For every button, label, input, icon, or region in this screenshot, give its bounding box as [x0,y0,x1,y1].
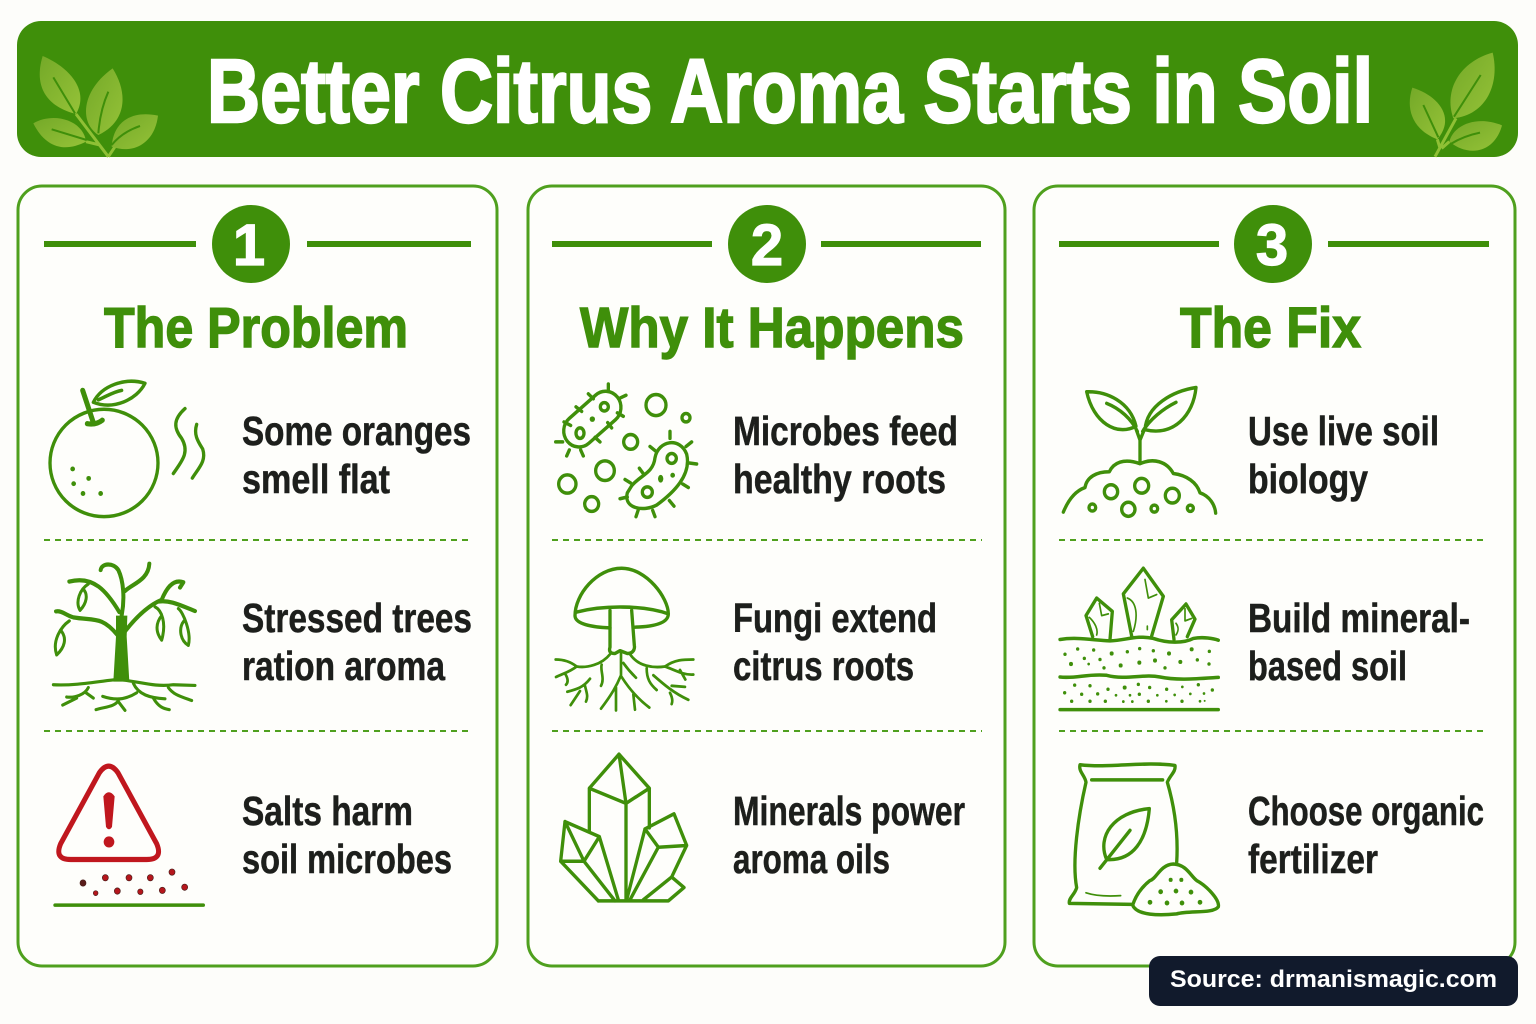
icon: orange with faint aroma [50,381,204,517]
icon: microbes [556,384,697,517]
panel: the fix [1034,186,1515,966]
panel: the problem [18,186,497,966]
text: microbes feed healthy roots [733,408,958,502]
text: stressed trees ration aroma: Stressed trees [242,595,472,641]
heading: the problem: The Problem [104,296,408,360]
icon: warning and salt [55,766,203,905]
text: salts harm soil microbes: Salts harm [242,788,413,834]
text: fungi extend citrus roots: Fungi extend [733,595,937,641]
step number 2: 2 [751,213,783,278]
source badge [1149,956,1518,1006]
text: microbes feed healthy roots: healthy roots [733,456,946,502]
icon: organic fertilizer bag [1069,764,1218,915]
text: salts harm soil microbes [242,788,452,882]
text: stressed trees ration aroma: ration aroma [242,643,446,689]
heading: why it happens: Why It Happens [580,296,964,360]
panel: why it happens [528,186,1005,966]
icon: mineral soil layers [1060,568,1218,710]
text: use live soil biology: biology [1248,456,1368,502]
text: minerals power aroma oils: Minerals power [733,788,965,834]
text: build mineral-based soil [1248,595,1470,689]
text: minerals power aroma oils: aroma oils [733,836,890,882]
text: build mineral-based soil: Build mineral- [1248,595,1470,641]
text: microbes feed healthy roots: Microbes feed [733,408,958,454]
title banner [17,21,1518,157]
icon: seedling in soil [1063,388,1216,516]
source badge: Source: drmanismagic.com [1170,966,1497,993]
icon: stressed tree [53,564,195,710]
step number 3: 3 [1256,213,1288,278]
text: fungi extend citrus roots: citrus roots [733,643,914,689]
text: choose organic fertilizer [1248,788,1484,882]
text: salts harm soil microbes: soil microbes [242,836,452,882]
step number 3 [1059,205,1489,283]
heading: the fix: The Fix [1180,296,1361,360]
text: some oranges smell flat: smell flat [242,456,390,502]
step number 1: 1 [233,213,265,278]
text: fungi extend citrus roots [733,595,937,689]
icon: mineral crystals [561,754,687,901]
icon: left leaves [33,56,158,157]
text: minerals power aroma oils [733,788,965,882]
step number 1 [44,205,471,283]
text: some oranges smell flat [242,408,471,502]
text: build mineral-based soil: based soil [1248,643,1407,689]
step number 2 [552,205,981,283]
text: use live soil biology [1248,408,1439,502]
text: some oranges smell flat: Some oranges [242,408,471,454]
icon: right leaves [1410,53,1502,157]
text: choose organic fertilizer: fertilizer [1248,836,1378,882]
text: stressed trees ration aroma [242,595,472,689]
icon: mushroom with roots [556,568,693,710]
text: use live soil biology: Use live soil [1248,408,1439,454]
